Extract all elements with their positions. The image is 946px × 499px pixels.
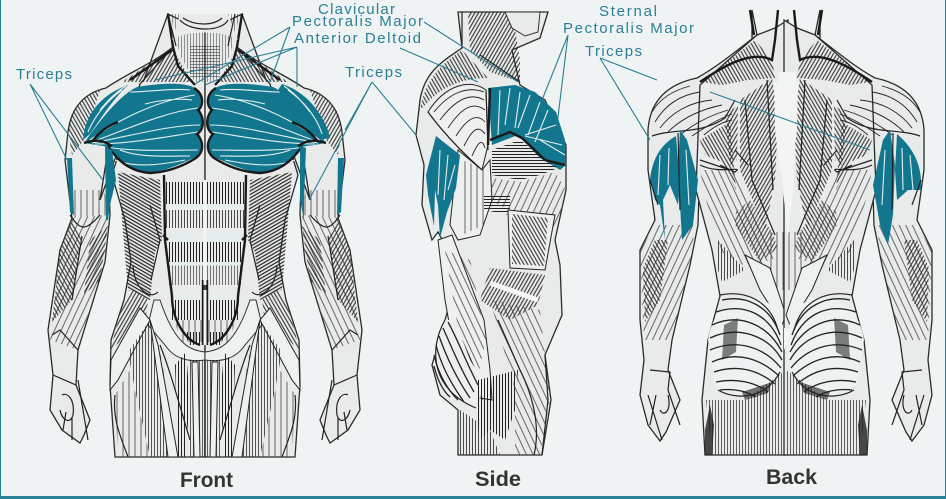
back left half <box>640 10 788 455</box>
hip crest <box>480 268 545 320</box>
gluteus <box>434 320 486 408</box>
caption: side: Side <box>475 468 521 491</box>
caption: back: Back <box>766 466 817 489</box>
leader lines: back labels <box>600 58 870 150</box>
front right half <box>205 14 362 457</box>
side pectoralis major <box>488 85 566 170</box>
label: triceps, front right: Triceps <box>345 64 402 81</box>
figure: front view <box>48 14 362 457</box>
pectoralis major, right <box>207 84 326 173</box>
leader lines: front labels <box>30 27 416 200</box>
back right half <box>784 10 932 455</box>
anterior deltoid, left <box>83 85 128 140</box>
neck and jaw <box>462 12 540 82</box>
label: sternal pectoralis major: Pectoralis Major <box>563 20 694 37</box>
rib cage muscles <box>484 140 566 228</box>
biceps and upper arm <box>450 150 492 240</box>
pectoralis major, left <box>84 84 203 173</box>
anterior deltoid, right <box>278 84 330 140</box>
label: clavicular pectoralis major <box>292 1 423 30</box>
figure: back view <box>640 10 932 455</box>
leader lines: side labels <box>400 22 568 125</box>
label: clavicular pectoralis major: Pectoralis Major <box>292 13 423 30</box>
side triceps <box>426 136 460 238</box>
label: clavicular pectoralis major: Clavicular <box>318 1 395 18</box>
hand and thigh <box>458 300 550 455</box>
label: triceps, front left: Triceps <box>16 66 72 83</box>
front triceps strips <box>67 146 344 220</box>
label: sternal pectoralis major <box>563 3 694 37</box>
deltoid <box>428 84 488 170</box>
figure: side view <box>416 12 566 455</box>
front neck and jaw <box>168 14 238 345</box>
side body silhouette <box>416 12 566 455</box>
upper back spine <box>778 72 796 240</box>
label: anterior deltoid: Anterior Deltoid <box>294 30 421 47</box>
label: triceps, back: Triceps <box>585 43 642 60</box>
forearm <box>438 235 492 400</box>
triceps, right <box>873 130 921 245</box>
caption: front: Front <box>180 469 233 492</box>
triceps, left <box>650 130 698 240</box>
front left half <box>48 14 205 457</box>
label: sternal pectoralis major: Sternal <box>599 3 657 20</box>
shoulder and trapezius hatching <box>420 50 488 110</box>
external oblique panel <box>508 210 555 270</box>
